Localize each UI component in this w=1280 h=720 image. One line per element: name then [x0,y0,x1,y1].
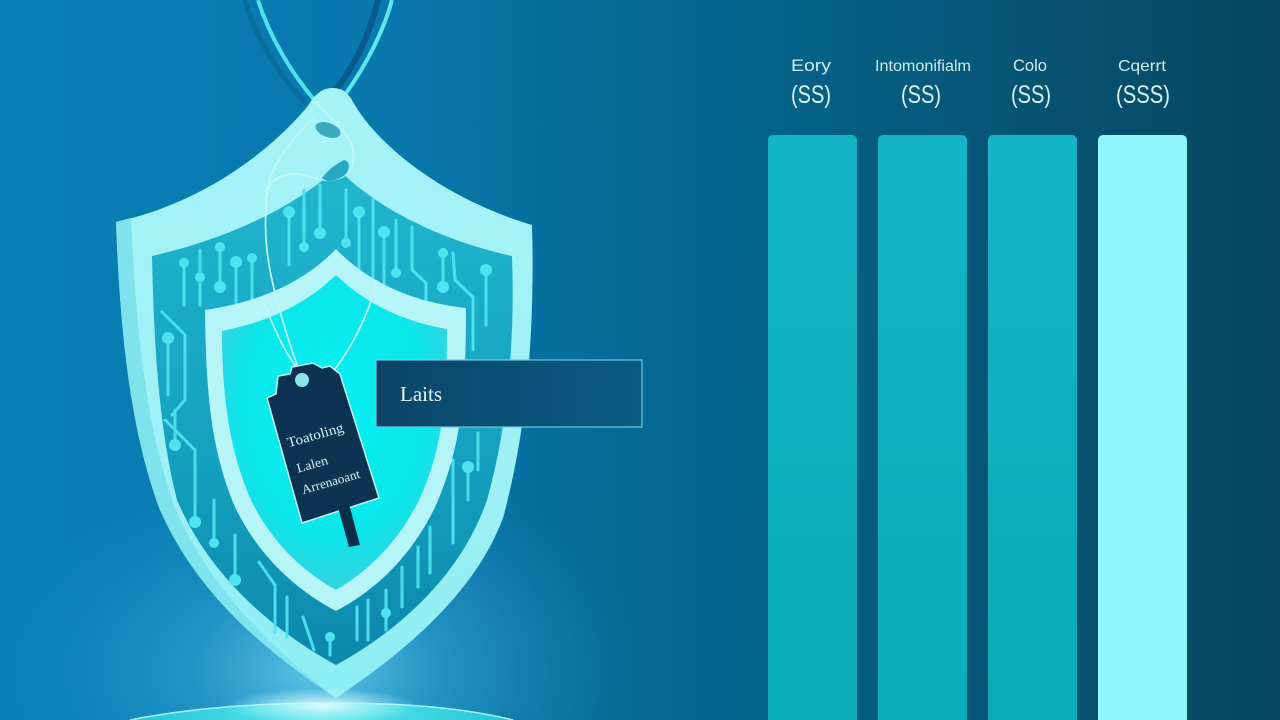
callout text: Laits [400,382,442,406]
inner shield frame [205,249,466,611]
column: Intomonifialm [875,58,971,720]
column: Cqerrt: Cqerrt [1118,58,1167,75]
column: Cqerrt [1098,58,1187,720]
tag text [286,420,362,497]
tag strings [262,102,377,373]
column: Colo [988,56,1077,720]
tag text: Arrenaoant [300,466,362,497]
tag stem [339,504,360,547]
column: Cqerrt: (SSS) [1116,81,1170,109]
circuit traces [162,185,486,655]
column: Colo: Colo [1013,56,1047,75]
shield circuit panel [152,168,513,665]
shield outer rim [116,88,533,698]
callout label box [376,360,642,427]
column: Intomonifialm: (SS) [901,81,941,109]
tag eyelet [295,373,309,387]
tag text: Lalen [295,452,330,476]
platform [130,688,513,720]
inner shield core [222,275,447,590]
hanging cords [245,0,392,104]
shield [116,88,533,698]
tag text: Toatoling [286,421,346,451]
price tag [267,363,379,547]
shield tip loop [313,119,349,181]
column: Eory: Eory [791,56,832,75]
column: Eory: (SS) [791,81,831,109]
column: Eory [768,56,857,720]
column: Intomonifialm: Intomonifialm [875,58,971,75]
column: Colo: (SS) [1011,81,1051,109]
